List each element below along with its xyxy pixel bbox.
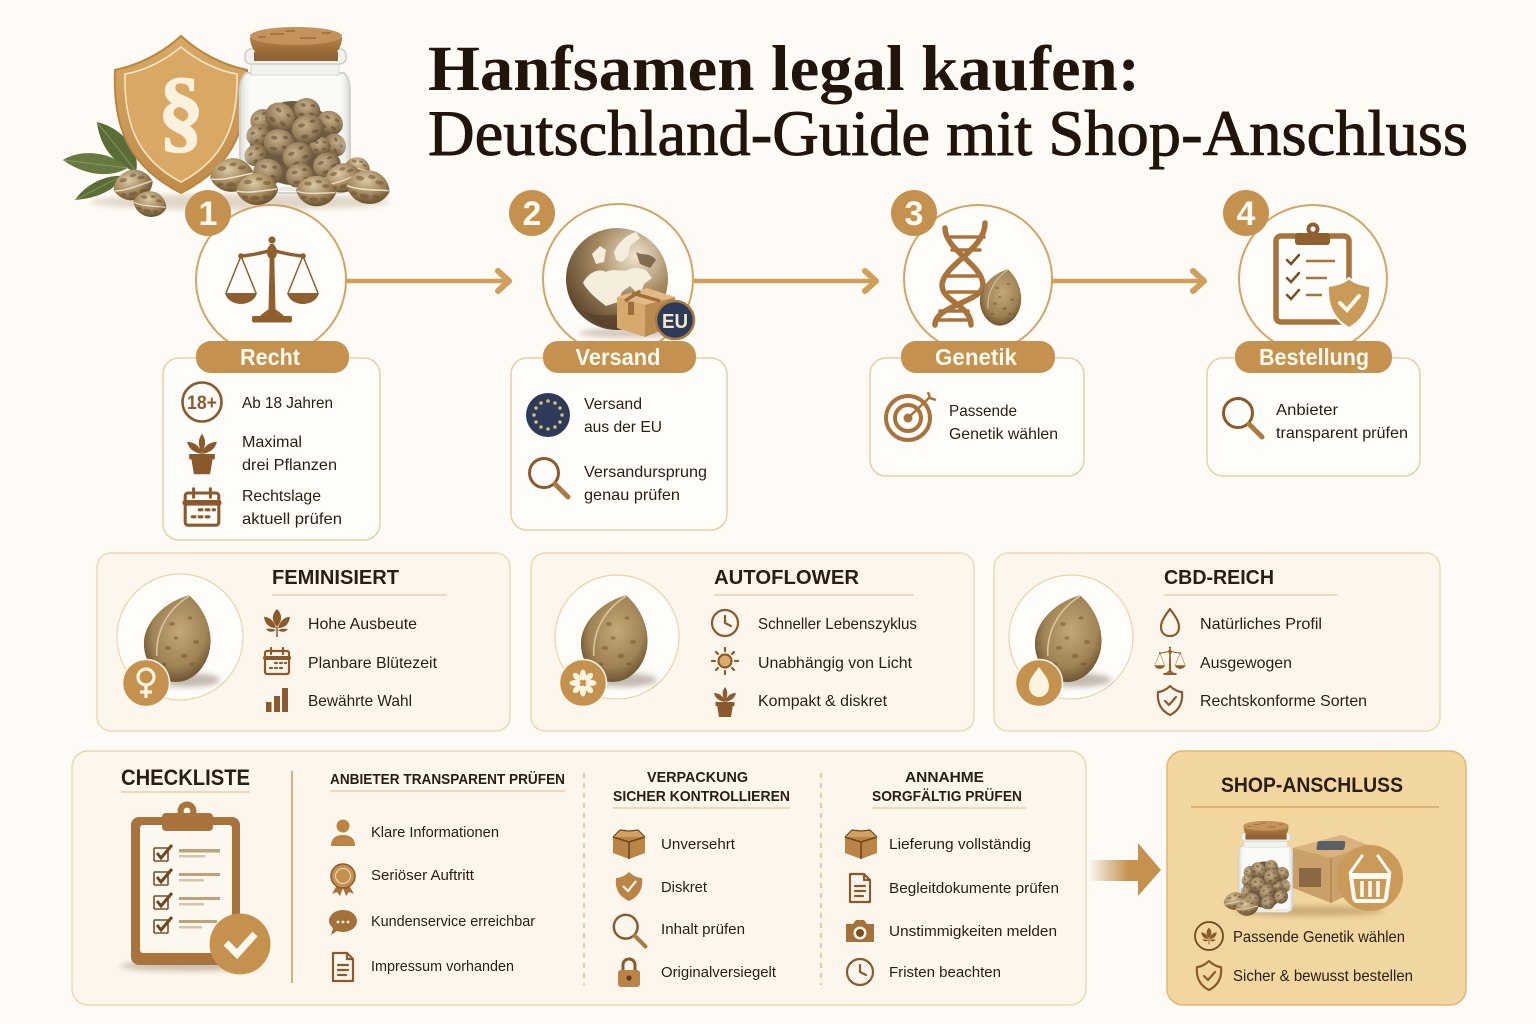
title: Hanfsamen legal kaufen:	[428, 33, 1140, 105]
pill label: Versand	[576, 344, 660, 370]
column: Annahme	[845, 769, 1059, 985]
step badge 3	[891, 190, 937, 236]
pill label	[196, 341, 349, 373]
dashed divider	[820, 773, 822, 985]
heading: ANNAHME	[905, 769, 984, 786]
icon: seed	[1028, 588, 1111, 688]
panel: Shop-Anschluss	[1167, 751, 1466, 1005]
list item: Passende Genetik wählen	[1233, 929, 1405, 946]
step 4: Bestellung	[1207, 190, 1420, 476]
heading: FEMINISIERT	[272, 567, 399, 589]
list item	[712, 648, 913, 674]
list item	[331, 864, 475, 896]
list item: Seriöser Auftritt	[371, 867, 475, 884]
list item: Unstimmigkeiten melden	[889, 923, 1057, 940]
list item: Kundenservice erreichbar	[371, 913, 535, 930]
heading: CHECKLISTE	[121, 765, 250, 790]
step badge 1	[185, 190, 231, 236]
pill label	[1235, 341, 1392, 373]
step badge 4	[1223, 190, 1269, 236]
item: target: Passende	[949, 403, 1017, 420]
step badge 1: 1	[199, 195, 217, 233]
list item	[845, 830, 1031, 859]
list item	[616, 872, 708, 901]
list item: Ausgewogen	[1200, 655, 1292, 672]
heading: AUTOFLOWER	[714, 567, 860, 589]
step 2: Versand	[509, 190, 876, 530]
column: Anbieter	[329, 771, 565, 981]
basket badge	[1337, 845, 1403, 911]
item: EU flag: aus der EU	[584, 419, 662, 436]
list item	[850, 874, 1059, 902]
list item: Impressum vorhanden	[371, 958, 514, 975]
item: legal status	[185, 488, 342, 528]
list item: Planbare Blütezeit	[308, 655, 438, 672]
heading	[613, 769, 790, 808]
icon: seed	[137, 588, 220, 688]
item: legal status: aktuell prüfen	[242, 511, 342, 528]
list item: Diskret	[661, 879, 708, 896]
panel: CBD-reich	[994, 553, 1440, 731]
list item: Unabhängig von Licht	[758, 655, 913, 672]
item: check origin: genau prüfen	[584, 487, 680, 504]
icon: scales of justice	[225, 236, 319, 322]
item: target: Genetik wählen	[949, 426, 1058, 443]
panel: Autoflower	[531, 553, 974, 731]
item: target	[886, 392, 1058, 443]
list item	[618, 959, 777, 987]
step badge 3: 3	[905, 195, 923, 233]
arrow: step 2 to 3	[694, 271, 876, 291]
badge: flower	[560, 660, 606, 706]
item: EU flag	[526, 393, 662, 437]
panel: Genetik	[870, 341, 1084, 476]
icon: seed	[574, 588, 657, 688]
icon: seed	[975, 265, 1027, 329]
list item: Kompakt & diskret	[758, 693, 888, 710]
hero illustration: shield, jar and seeds	[63, 27, 393, 220]
EU badge: EU	[662, 311, 688, 333]
divider	[291, 771, 293, 983]
arrow: to shop	[1088, 843, 1161, 896]
panel: Checkliste	[72, 751, 1086, 1005]
parcel	[617, 288, 675, 337]
pill label	[543, 341, 696, 373]
panel: Bestellung	[1207, 341, 1420, 476]
list item	[847, 959, 1001, 985]
arrow: step 3 to 4	[1052, 271, 1204, 291]
column: Verpackung	[613, 769, 790, 987]
title: Deutschland-Guide mit Shop-Anschluss	[428, 98, 1468, 170]
panel: Recht	[163, 341, 380, 540]
list item	[846, 920, 1057, 942]
heading: VERPACKUNG	[647, 769, 748, 786]
list item	[1161, 609, 1322, 636]
list item: Inhalt prüfen	[661, 921, 745, 938]
list item: Natürliches Profil	[1200, 616, 1322, 633]
item: check origin: Versandursprung	[584, 464, 707, 481]
badge: drop	[1016, 660, 1062, 706]
panel: Feminisiert	[97, 553, 510, 731]
icon: shield with paragraph sign	[115, 36, 247, 193]
badge: female	[122, 660, 170, 706]
icon: clipboard with shield	[1276, 222, 1370, 328]
list item: Schneller Lebenszyklus	[758, 616, 917, 633]
list item	[1154, 647, 1292, 675]
heading: SHOP-ANSCHLUSS	[1221, 774, 1403, 797]
list item	[266, 688, 412, 712]
icon: globe with parcel	[566, 228, 694, 339]
item: legal status: Rechtslage	[242, 488, 321, 505]
item: EU flag: Versand	[584, 396, 642, 413]
step 1: Recht	[163, 190, 509, 540]
icon: DNA helix	[935, 223, 985, 325]
step badge 2: 2	[523, 195, 541, 233]
parcel	[1293, 835, 1368, 903]
list item: Lieferung vollständig	[889, 836, 1031, 853]
item: check provider	[1224, 398, 1408, 442]
item: age: Ab 18 Jahren	[242, 395, 333, 412]
item: check provider: transparent prüfen	[1276, 425, 1408, 442]
icon: loose seeds	[110, 154, 393, 220]
item: check origin	[530, 458, 707, 504]
panel: Versand	[511, 341, 727, 530]
icon: glass jar	[240, 27, 350, 193]
list item	[331, 820, 499, 846]
list item	[1158, 686, 1367, 715]
icon: large clipboard	[120, 802, 270, 974]
item: age	[182, 382, 333, 422]
list item	[264, 609, 417, 637]
list item	[333, 953, 514, 981]
icon: shield with paragraph sign: §	[158, 59, 204, 161]
pill label: Recht	[240, 344, 300, 370]
list item: Sicher & bewusst bestellen	[1233, 968, 1413, 985]
list item	[1197, 961, 1413, 990]
item: plants: drei Pflanzen	[242, 457, 337, 474]
heading: SICHER KONTROLLIEREN	[613, 788, 790, 805]
item: age: 18+	[187, 393, 217, 414]
list item	[329, 910, 535, 935]
list item	[614, 915, 745, 946]
list item	[613, 830, 736, 859]
list item: Klare Informationen	[371, 824, 499, 841]
step badge 4: 4	[1237, 195, 1256, 233]
pill label: Genetik	[935, 344, 1017, 370]
jar	[1239, 821, 1293, 912]
dashed divider	[583, 773, 585, 985]
heading: SORGFÄLTIG PRÜFEN	[872, 788, 1022, 805]
list item	[1195, 922, 1405, 950]
heading: CBD-REICH	[1164, 567, 1274, 589]
list item: Hohe Ausbeute	[308, 616, 417, 633]
illustration: jar, parcel and basket	[1222, 821, 1403, 917]
item: plants	[187, 434, 337, 474]
step badge 2	[509, 190, 555, 236]
title	[428, 33, 1468, 170]
item: check provider: Anbieter	[1276, 402, 1339, 419]
pill label: Bestellung	[1259, 344, 1369, 370]
list item	[714, 687, 888, 717]
list item: Originalversiegelt	[661, 964, 777, 981]
heading: ANBIETER TRANSPARENT PRÜFEN	[330, 771, 565, 788]
item: plants: Maximal	[242, 434, 302, 451]
step 3: Genetik	[870, 190, 1204, 476]
list item	[265, 648, 438, 674]
list item: Unversehrt	[661, 836, 736, 853]
list item: Rechtskonforme Sorten	[1200, 693, 1367, 710]
list item	[712, 610, 917, 636]
pill label	[901, 341, 1055, 373]
list item: Bewährte Wahl	[308, 693, 412, 710]
list item: Fristen beachten	[889, 964, 1001, 981]
heading	[872, 769, 1026, 808]
list item: Begleitdokumente prüfen	[889, 880, 1059, 897]
arrow: step 1 to 2	[346, 271, 509, 291]
